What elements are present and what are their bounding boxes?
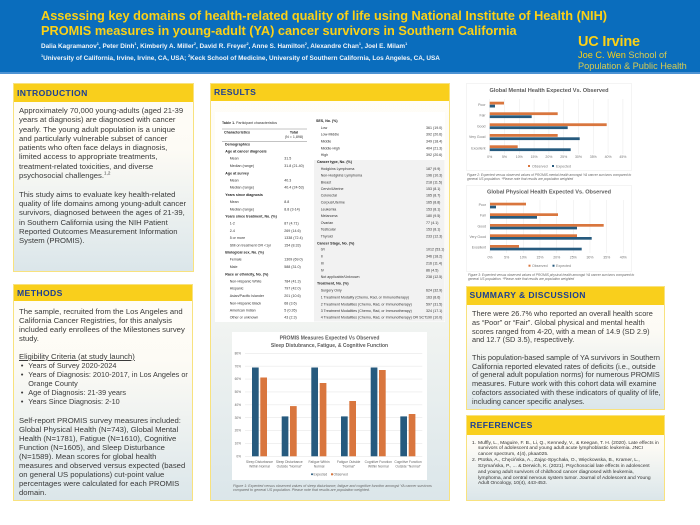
introduction text: treatment-related toxicities, and diverse: [19, 162, 153, 171]
heading: results: RESULTS: [214, 87, 256, 97]
summary text: including cancer specific analyses.: [472, 397, 585, 406]
table 1: participant characteristics: Age at survey: [225, 171, 249, 175]
introduction text: [19, 106, 186, 245]
chart: global mental health: 30%: [575, 155, 582, 159]
chart: PROMIS measures expected vs observed: 20%: [235, 429, 241, 433]
table 1: participant characteristics: 218 (11.5): [426, 180, 442, 184]
table 1: participant characteristics: Cervix/Uterine: [321, 187, 343, 191]
logo: UC Irvine: Population & Public Health: [578, 60, 687, 70]
table 1: participant characteristics: 153 (8.1): [426, 187, 440, 191]
table 1: participant characteristics: Leukemia: [321, 207, 336, 211]
table 1: participant characteristics: Table 1. Participant characteristics: [222, 121, 277, 125]
table 1: participant characteristics: 43 (2.3): [284, 316, 297, 320]
reference list: Szymańska, P., ... & Derwich, K. (2021). Psychosocial late effects in adolescent: [478, 464, 650, 469]
chart: PROMIS measures expected vs observed: Sleep Distubrance, Fatigue, & Cognitive Function: [271, 343, 388, 349]
table 1: participant characteristics: [215, 112, 445, 322]
heading: results: [211, 84, 449, 101]
table 1: participant characteristics: 588 (31.0): [284, 265, 301, 269]
table 1: participant characteristics: 86 (4.5): [426, 268, 438, 272]
table 1: participant characteristics: Years since diagnosis: [225, 193, 263, 197]
table 1: participant characteristics: 196 (10.3): [426, 174, 442, 178]
methods text: study.: [19, 334, 39, 343]
introduction text: years at diagnosis) are diagnosed with cancer: [19, 115, 175, 124]
table 1: participant characteristics: 1338 (72.4): [284, 236, 303, 240]
methods text: Years of Survey 2020-2024: [28, 361, 116, 370]
chart: PROMIS measures expected vs observed: Outside "Normal": [395, 464, 421, 468]
table 1: participant characteristics: Hodgkins Lymphoma: [321, 167, 354, 171]
figure 1 caption: Figure 1: Expected versus observed values of sleep disturbance, fatigue and cognitive function amongst YA cancer survivors: [233, 484, 432, 488]
table 1: participant characteristics: Characteristics: [224, 130, 250, 134]
chart: global physical health: Excellent: [472, 246, 486, 250]
table 1: participant characteristics: Thyroid: [321, 234, 333, 238]
methods text: Age of Diagnosis: 21-39 years: [28, 388, 126, 397]
reference list: and young adult survivors of childhood cancer diagnosed with leukemia,: [478, 470, 634, 475]
table 1: participant characteristics: Age at cancer diagnosis: [225, 149, 267, 153]
table 1: participant characteristics: Corpus/Uterine: [321, 201, 345, 205]
chart: global physical health: 0%: [487, 256, 493, 260]
table 1: participant characteristics: Cancer type, No. (%): [317, 160, 353, 164]
panel: results: [210, 83, 450, 501]
logo: UC Irvine: [578, 34, 687, 71]
table 1: participant characteristics: High: [321, 153, 328, 157]
table 1: participant characteristics: Breast: [321, 180, 331, 184]
chart: global physical health: [466, 185, 632, 272]
introduction text: and particularly vulnerable subset of cancer: [19, 134, 167, 143]
table 1: participant characteristics: Ovarian: [321, 221, 333, 225]
table 1: participant characteristics: 31.5: [284, 157, 291, 161]
table 1: participant characteristics: Testicular: [321, 228, 337, 232]
chart: global physical health: 10%: [520, 256, 527, 260]
table 1: participant characteristics: 3 Treatment Modalities (Chemo, Rad, or Immunotherapy): [321, 309, 412, 313]
table 1: participant characteristics: 190 (10.0): [426, 316, 442, 320]
title: [41, 8, 607, 38]
table 1: participant characteristics: 154 (8.33): [284, 243, 301, 247]
table 1: participant characteristics: 324 (17.1): [426, 309, 442, 313]
summary text: cofactors associated with these indicators of quality of life,: [472, 388, 661, 397]
table 1: participant characteristics: Mean: [230, 178, 239, 182]
introduction text: in Southern California using the NIH Patient: [19, 218, 168, 227]
panel: methods: [13, 284, 193, 501]
table 1: participant characteristics: 392 (20.6): [426, 133, 442, 137]
reference list: 2.: [472, 458, 476, 463]
panel: references: [466, 415, 665, 501]
table 1: participant characteristics: 346 (18.2): [426, 255, 442, 259]
chart: PROMIS measures expected vs observed: 60%: [235, 377, 241, 381]
chart: PROMIS measures expected vs observed: Cognitive Function: [365, 460, 392, 464]
methods text: •: [21, 388, 23, 397]
table 1: participant characteristics: 1-2: [230, 222, 235, 226]
table 1: participant characteristics: 8.8 (3-14): [284, 207, 300, 211]
chart: PROMIS measures expected vs observed: 40%: [235, 403, 241, 407]
reference list: lymphoma, and central nervous system tumor. Journal of Adolescent and Young: [478, 476, 651, 481]
chart: global physical health: 5%: [504, 256, 509, 260]
chart: global mental health: Global Mental Health Expected Vs. Observed: [489, 88, 609, 94]
table 1: participant characteristics: 201 (10.6): [284, 294, 301, 298]
table 1: participant characteristics: 163 (8.6): [426, 295, 440, 299]
chart: PROMIS measures expected vs observed: Within Normal: [249, 464, 270, 468]
methods text: measures and observed versus expected (based: [19, 461, 185, 470]
table 1: participant characteristics: Years since treatment, No. (%): [225, 214, 278, 218]
table 1: participant characteristics: 233 (12.3): [426, 234, 442, 238]
heading: methods: [14, 285, 192, 301]
chart: PROMIS measures expected vs observed: Expected: [314, 472, 327, 476]
table 1: participant characteristics: 5 or more: [230, 236, 245, 240]
figure 3 caption: Figure 3: Expected versus observed values of PROMIS physical health amongst YA cancer survivors compared to: [468, 273, 634, 277]
chart: PROMIS measures expected vs observed: 0%: [236, 454, 241, 458]
chart: PROMIS measures expected vs observed: Outside "Normal": [277, 464, 303, 468]
chart: global physical health: 15%: [536, 256, 544, 260]
table 1: participant characteristics: 165 (8.8): [426, 201, 440, 205]
table 1: participant characteristics: Median (range): [230, 186, 254, 190]
table 1: participant characteristics: 1012 (53.1): [426, 248, 444, 252]
chart: global mental health: 20%: [545, 155, 552, 159]
table 1: participant characteristics: 404 (21.3): [426, 146, 442, 150]
figure 2 caption: [467, 173, 632, 181]
table 1: participant characteristics: Middle-High: [321, 146, 340, 150]
chart: PROMIS measures expected vs observed: Observed: [334, 472, 348, 476]
table 1: participant characteristics: Male: [230, 265, 237, 269]
chart: global mental health: Observed: [532, 164, 548, 168]
chart: global physical health: 30%: [586, 256, 594, 260]
chart: global mental health: Expected: [556, 164, 571, 168]
introduction text: System (PROMIS).: [19, 236, 84, 245]
heading: methods: METHODS: [17, 288, 63, 298]
chart: global physical health: Good: [477, 224, 486, 228]
table 1: participant characteristics: 187 (9.9): [426, 167, 440, 171]
title: PROMIS measures in young-adult (YA) cancer survivors in Southern California: [41, 23, 517, 38]
table 1: participant characteristics: Middle: [321, 139, 331, 143]
panel: introduction: [13, 83, 194, 272]
chart: global physical health: 20%: [553, 256, 560, 260]
chart: global mental health: 25%: [560, 155, 567, 159]
methods text: (N=1589). Mean scores for global health: [19, 452, 156, 461]
introduction text: quality of life domains among young-adult cancer: [19, 199, 186, 208]
summary text: California reported elevated rates of deficits (i.e., outside: [472, 362, 656, 371]
summary text: [472, 309, 661, 406]
panel: summary and discussion: [466, 286, 665, 410]
table 1: participant characteristics: 0/I: [321, 248, 325, 252]
table 1: participant characteristics: Melanoma: [321, 214, 337, 218]
table 1: participant characteristics: 180 (9.5): [426, 214, 440, 218]
table 1: participant characteristics: 349 (18.4): [426, 139, 442, 143]
table 1: participant characteristics: Still on treatment OR <1yr: [230, 243, 272, 247]
table 1: participant characteristics: 153 (8.1): [426, 207, 440, 211]
header banner: [0, 0, 700, 74]
introduction text: survivors, diagnosed between the ages of 21-39,: [19, 208, 185, 217]
table 1: participant characteristics: Low-Middle: [321, 133, 339, 137]
chart: PROMIS measures expected vs observed: Sleep Disturbance: [246, 460, 273, 464]
table 1: participant characteristics: Non-Hodgkins Lymphoma: [321, 174, 362, 178]
chart: global physical health: Expected: [556, 264, 571, 268]
table 1: participant characteristics: Not applicable/Unknown: [321, 275, 359, 279]
introduction text: patients who often face delays in diagnosis,: [19, 143, 167, 152]
chart: global mental health: 35%: [590, 155, 597, 159]
methods text: on general US populations) cut-point value: [19, 470, 164, 479]
table 1: participant characteristics: 624 (32.9): [426, 289, 442, 293]
table 1: participant characteristics: Race or ethnicity, No. (%): [225, 272, 269, 276]
chart: global mental health: 5%: [502, 155, 507, 159]
table 1: participant characteristics: American Indian: [230, 308, 256, 312]
table 1: participant characteristics: Non-Hispanic White: [230, 280, 261, 284]
chart: global mental health: Poor: [478, 103, 486, 107]
methods text: domain.: [19, 488, 46, 497]
table 1: participant characteristics: Low: [321, 126, 328, 130]
chart: global physical health: Global Physical Health Expected Vs. Observed: [487, 190, 612, 196]
table 1: participant characteristics: 238 (12.5): [426, 275, 442, 279]
table 1: participant characteristics: Asian/Pacific Islander: [230, 294, 265, 298]
table 1: participant characteristics: 797 (42.0): [284, 287, 301, 291]
table 1: participant characteristics: (N = 1,898): [285, 135, 303, 139]
table 1: participant characteristics: 40.3: [284, 178, 291, 182]
chart: PROMIS measures expected vs observed: 50%: [235, 390, 241, 394]
chart: PROMIS measures expected vs observed: Within Normal: [368, 464, 389, 468]
table 1: participant characteristics: Mean: [230, 157, 239, 161]
chart: PROMIS measures expected vs observed: "Normal": [342, 464, 356, 468]
table 1: participant characteristics: IV: [321, 268, 325, 272]
figure 3 caption: [468, 273, 634, 281]
table 1: participant characteristics: 216 (11.4): [426, 261, 442, 265]
chart: PROMIS measures expected vs observed: PROMIS Measures Expected Vs Observed: [280, 336, 379, 342]
chart: PROMIS measures expected vs observed: 80%: [235, 351, 241, 355]
methods text: Health (N=1781), Fatigue (N=1610), Cognitive: [19, 434, 176, 443]
chart: global mental health: [466, 83, 632, 171]
table 1: participant characteristics: Median (range): [230, 207, 254, 211]
table 1: participant characteristics: 153 (8.1): [426, 228, 440, 232]
table 1: participant characteristics: 4 Treatment Modalities (Chemo, Rad, or Immunotherapy) OR SCT: [321, 316, 427, 320]
chart: PROMIS measures expected vs observed: Sleep Disturbance: [276, 460, 303, 464]
summary text: of general adult population norms) for numerous PROMIS: [472, 370, 660, 379]
table 1: participant characteristics: Total: [290, 130, 298, 134]
table 1: participant characteristics: Mean: [230, 200, 239, 204]
summary text: measures. Future work with this cohort data will examine: [472, 379, 656, 388]
table 1: participant characteristics: 361 (19.0): [426, 126, 442, 130]
heading: introduction: INTRODUCTION: [17, 88, 88, 98]
methods text: Function (N=1605), and Sleep Disturbance: [19, 443, 165, 452]
methods text: Years of Diagnosis: 2010-2017, in Los Angeles or: [28, 370, 188, 379]
table 1: participant characteristics: 1 Treatment Modality (Chemo, Rad, or Immunotherapy): [321, 295, 409, 299]
table 1: participant characteristics: 597 (31.5): [426, 302, 442, 306]
summary text: as “Poor” or “Fair”. Global physical and mental health: [472, 318, 645, 327]
figure 1 caption: compared to general US population. Please note that results are population weighted.: [233, 488, 370, 492]
table 1: participant characteristics: 68 (3.6): [284, 301, 297, 305]
logo: UC Irvine: Joe C. Wen School of: [578, 50, 667, 60]
methods text: Years Since Diagnosis: 2-10: [28, 397, 120, 406]
table 1: participant characteristics: 8.8: [284, 200, 289, 204]
chart: global mental health: Good: [477, 124, 486, 128]
chart: global physical health: Very Good: [469, 235, 486, 239]
table 1: participant characteristics: Demographics: [225, 142, 250, 146]
chart: PROMIS measures expected vs observed: Normal: [314, 464, 325, 468]
title: Assessing key domains of health-related quality of life using National Institute of Health (NIH): [41, 8, 607, 23]
table 1: participant characteristics: 784 (41.3): [284, 280, 301, 284]
chart: PROMIS measures expected vs observed: Cognitive Function: [394, 460, 422, 464]
chart: global mental health: Excellent: [471, 146, 486, 150]
table 1: participant characteristics: 5 (0.26): [284, 308, 297, 312]
heading: introduction: [14, 84, 193, 102]
introduction text: limited access to appropriate treatments,: [19, 152, 157, 161]
introduction text: psychosocial challenges.1,2: [19, 171, 110, 180]
introduction text: yearly. The young adult population is a unique: [19, 125, 175, 134]
table 1: participant characteristics: Median (range): [230, 164, 254, 168]
table 1: participant characteristics: Hispanic: [230, 287, 244, 291]
chart: global physical health: 25%: [570, 256, 577, 260]
chart: PROMIS measures expected vs observed: Fatigue Outside: [337, 460, 361, 464]
methods text: California Cancer Registries, for this analysis: [19, 316, 172, 325]
methods text: Self-report PROMIS survey measures included:: [19, 416, 181, 425]
table 1: participant characteristics: Female: [230, 258, 242, 262]
chart: global mental health: Very Good: [469, 135, 486, 139]
reference list: Ptotka, A., Chęcińska, A., Zając-Spychała, O., Więckowska, B., Kramer, L.,: [478, 458, 640, 463]
methods text: Orange County: [28, 379, 78, 388]
table 1: participant characteristics: Treatment, No. (%): [317, 282, 349, 286]
reference list: Adult Oncology, 10(4), 443-453.: [478, 481, 547, 486]
authors: Dalia Kagramanov1, Peter Dinh1, Kimberly A. Miller2, David R. Freyer2, Anne S. Hamilton2, Alexandre Chan1, Joel E. Milam1: [41, 42, 407, 50]
logo: UC Irvine: UC Irvine: [578, 34, 640, 50]
heading: summary and discussion: [467, 287, 664, 305]
figure 2 caption: general US population. *Please note that results are population weighted: [467, 177, 573, 181]
table 1: participant characteristics: 2 Treatment Modalities (Chemo, Rad, or Immunotherapy): [321, 302, 412, 306]
chart: global mental health: 15%: [531, 155, 538, 159]
methods text: included early enrollees of the Milestones survey: [19, 325, 185, 334]
reference list: Muffly, L., Maguire, F. B., Li, Q., Kennedy, V., & Keegan, T. H. (2020). Late effects in: [478, 440, 659, 446]
table 1: participant characteristics: 269 (14.6): [284, 229, 301, 233]
methods text: •: [21, 370, 23, 379]
chart: PROMIS measures expected vs observed: 70%: [235, 364, 241, 368]
table 1: participant characteristics: Biological sex, No. (%): [225, 251, 265, 255]
chart: global mental health: 40%: [605, 155, 612, 159]
chart: PROMIS measures expected vs observed: 30%: [235, 416, 241, 420]
methods text: [19, 306, 188, 497]
table 1: participant characteristics: 165 (8.7): [426, 194, 440, 198]
table 1: participant characteristics: 77 (4.1): [426, 221, 438, 225]
methods text: Global Physical Health (N=743), Global Mental: [19, 425, 178, 434]
heading: references: [467, 416, 664, 435]
table 1: participant characteristics: Colorectal: [321, 194, 337, 198]
table 1: participant characteristics: Cancer Stage, No. (%): [317, 241, 355, 245]
affiliations: 1University of California, Irvine, Irvine, CA, USA; 2Keck School of Medicine, University of Southern California, Los Angeles, CA, USA: [41, 54, 440, 62]
chart: PROMIS measures expected vs observed: Fatigue Within: [308, 460, 330, 464]
table 1: participant characteristics: 87 (4.71): [284, 222, 299, 226]
chart: global physical health: Fair: [480, 214, 487, 218]
table 1: participant characteristics: Other or unknown: [230, 316, 258, 320]
table 1: participant characteristics: 31.8 (21-40): [284, 164, 304, 168]
heading: references: REFERENCES: [470, 420, 533, 430]
methods text: Eligibility Criteria (at study launch): [19, 352, 135, 361]
chart: global physical health: 40%: [620, 256, 627, 260]
table 1: participant characteristics: Non-Hispanic Black: [230, 301, 261, 305]
table 1: participant characteristics: Surgery Only: [321, 289, 342, 293]
figure 1 caption: [233, 484, 432, 492]
heading: summary and discussion: SUMMARY & DISCUSSION: [470, 290, 586, 300]
table 1: participant characteristics: SES, No. (%): [316, 119, 338, 123]
chart: global mental health: 45%: [619, 155, 626, 159]
chart: PROMIS measures expected vs observed: 10%: [235, 442, 241, 446]
summary text: There were 26.7% who reported an overall health score: [472, 309, 653, 318]
reference list: cancer spectrum, 4(4), pkaa025.: [478, 452, 548, 457]
table 1: participant characteristics: 1309 (69.0): [284, 258, 303, 262]
chart: global physical health: Poor: [479, 203, 487, 207]
chart: global physical health: Observed: [532, 264, 548, 268]
reference list: [472, 440, 659, 486]
introduction text: Approximately 70,000 young-adults (aged 21-39: [19, 106, 183, 115]
summary text: scores ranged from 4-20, with a mean of 14.9 (SD 2.9): [472, 327, 650, 336]
introduction text: Reported Outcomes Measurement Information: [19, 227, 178, 236]
table 1: participant characteristics: 392 (20.6): [426, 153, 442, 157]
reference list: 1.: [472, 440, 476, 446]
chart: global mental health: Fair: [479, 113, 486, 117]
introduction text: This study aims to evaluate key health-related: [19, 190, 175, 199]
chart: PROMIS measures expected vs observed: [232, 332, 427, 480]
chart: global mental health: 10%: [516, 155, 523, 159]
chart: global mental health: 0%: [487, 155, 492, 159]
table 1: participant characteristics: II: [321, 255, 323, 259]
chart: global physical health: 35%: [603, 256, 610, 260]
methods text: percentages were calculated for each PROMIS: [19, 479, 179, 488]
methods text: The sample, recruited from the Los Angeles and: [19, 306, 183, 316]
methods text: •: [21, 361, 23, 370]
reference list: survivors of adolescent and young adult acute lymphoblastic leukemia. JNCI: [478, 446, 643, 451]
table 1: participant characteristics: III: [321, 261, 324, 265]
summary text: and 12.7 (SD 3.5), respectively.: [472, 335, 574, 344]
methods text: •: [21, 397, 23, 406]
figure 3 caption: general US population. *Please note that results are population weighted: [468, 277, 574, 281]
figure 2 caption: Figure 2: Expected versus observed values of PROMIS mental health amongst YA cancer survivors compared to: [467, 173, 631, 177]
table 1: participant characteristics: 2-4: [230, 229, 235, 233]
summary text: This population-based sample of YA survivors in Southern: [472, 353, 660, 362]
table 1: participant characteristics: 40.4 (24-53): [284, 186, 304, 190]
